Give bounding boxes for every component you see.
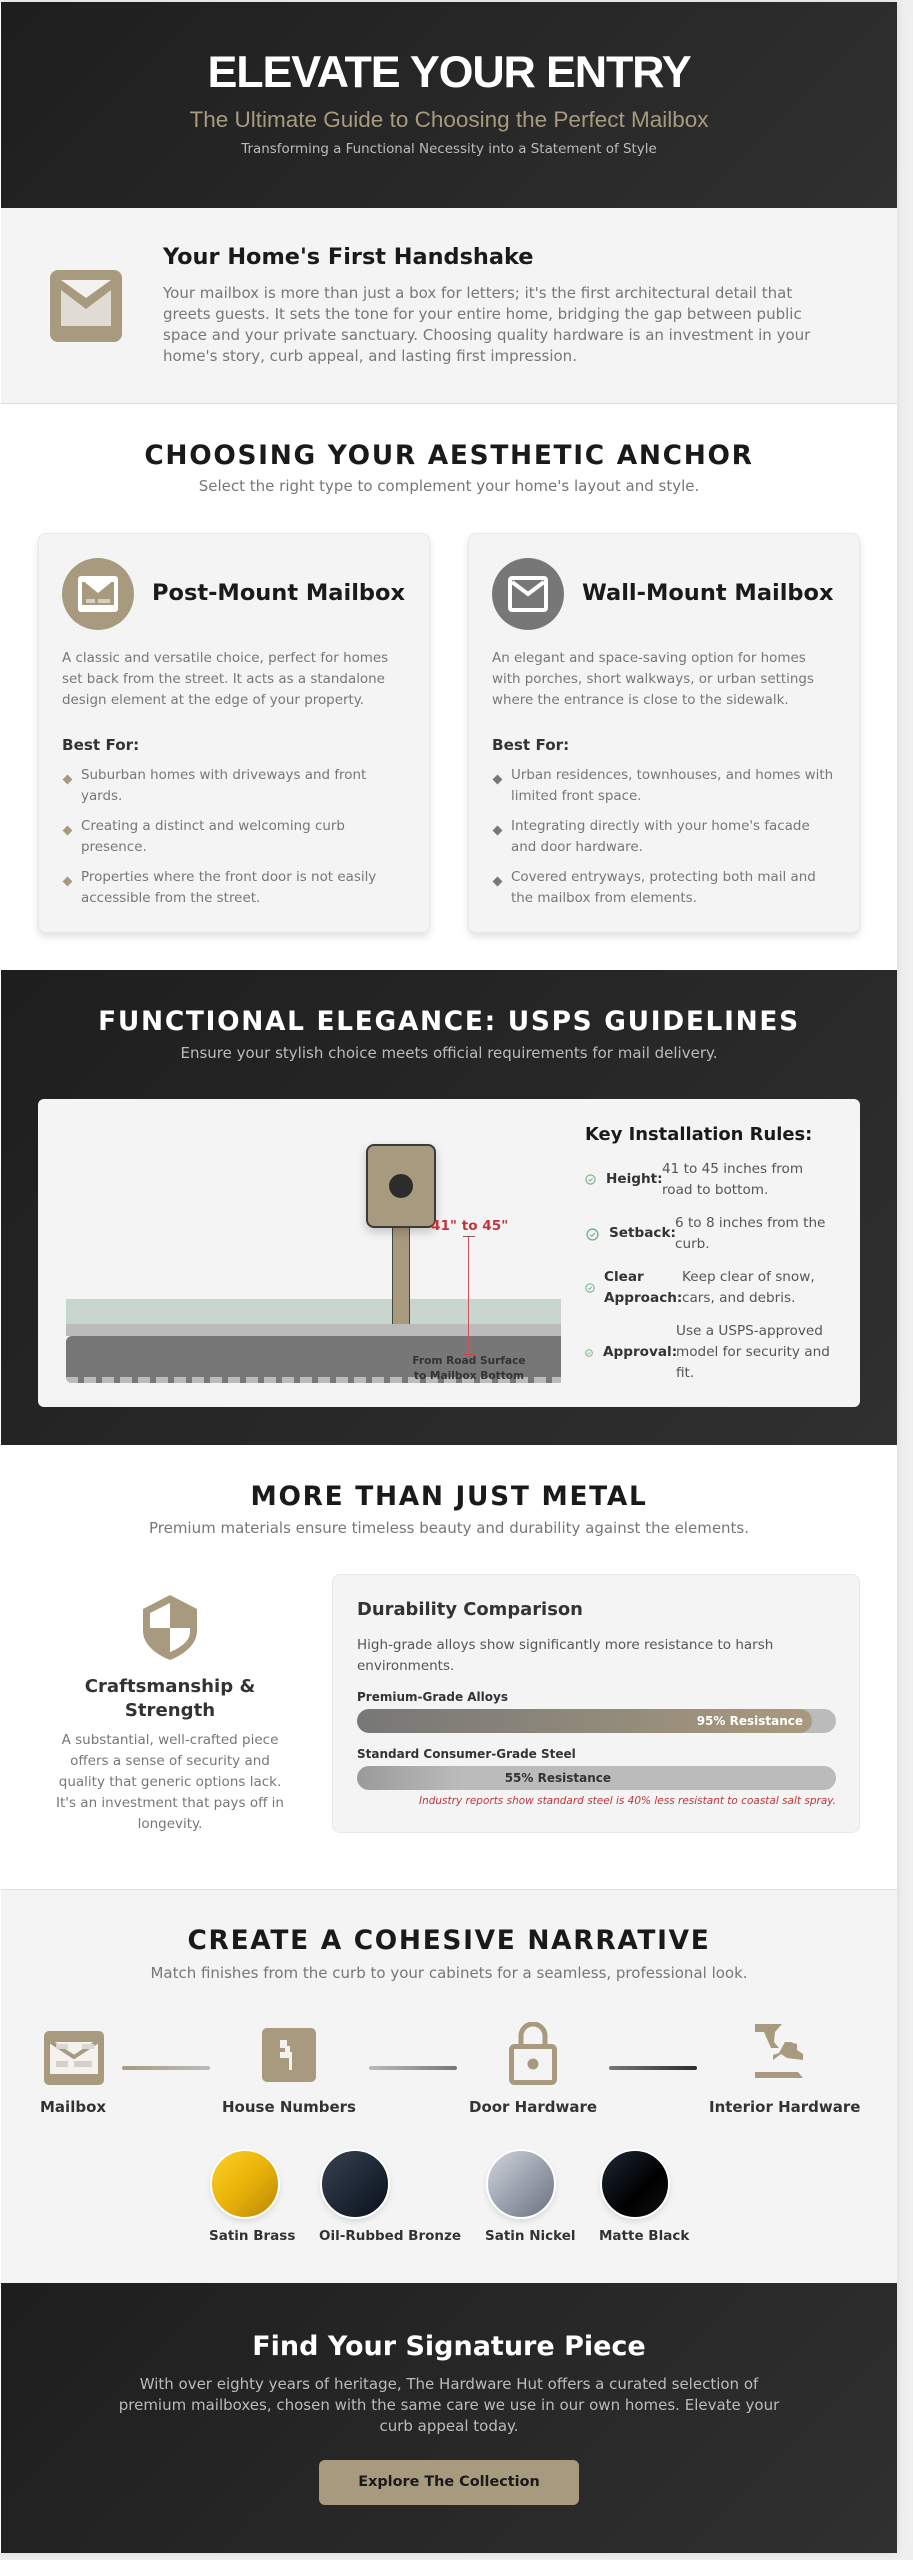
bullet 1: Urban residences, townhouses, and homes with xyxy=(511,768,833,783)
rule: height xyxy=(585,1161,803,1198)
rule: clear approach: Clear xyxy=(604,1269,644,1285)
label: premium: Premium-Grade Alloys xyxy=(357,1690,508,1704)
bullet 3: Covered entryways, protecting both mail and xyxy=(511,870,816,885)
label: door hardware: Door Hardware xyxy=(469,2098,597,2116)
bullet 2 xyxy=(62,819,345,855)
bullet 1: yards. xyxy=(81,789,122,804)
grass band xyxy=(66,1299,561,1324)
measure note: to Mailbox Bottom xyxy=(414,1370,524,1382)
road xyxy=(66,1336,561,1383)
swatch: matte black xyxy=(600,2149,670,2219)
rule: setback: curb. xyxy=(675,1236,710,1252)
swatch: satin nickel xyxy=(486,2149,556,2219)
bullet 2 xyxy=(492,819,810,855)
icon: post-mount mailbox xyxy=(62,558,134,630)
rule: approval: Approval: xyxy=(603,1344,677,1360)
line: door to interior xyxy=(609,2066,697,2070)
section: materials xyxy=(1,1445,897,1889)
rule: setback xyxy=(586,1215,825,1252)
bullet 1 xyxy=(62,768,366,804)
bullet 3: accessible from the street. xyxy=(81,891,260,906)
craftsmanship heading xyxy=(85,1676,255,1721)
card description: set back from the street. It acts as a standalone xyxy=(62,672,385,687)
bullet 2: presence. xyxy=(81,840,147,855)
cta copy: curb appeal today. xyxy=(379,2417,519,2435)
panel: installation xyxy=(38,1099,860,1407)
card: wall-mount xyxy=(468,533,860,933)
icon: shield xyxy=(143,1595,197,1660)
bullet 2: and door hardware. xyxy=(511,840,643,855)
durability description xyxy=(357,1637,773,1674)
craftsmanship heading: Craftsmanship & xyxy=(85,1676,255,1697)
intro copy: home's story, curb appeal, and lasting first impression. xyxy=(163,347,577,365)
industry note: Industry reports show standard steel is 40% less resistant to coastal salt spray. xyxy=(419,1795,836,1807)
intro copy: greets guests. It sets the tone for your entire home, bridging the gap between public xyxy=(163,305,802,323)
card description: A classic and versatile choice, perfect for homes xyxy=(62,651,388,666)
icon: check xyxy=(585,1283,595,1293)
card description: design element at the edge of your property. xyxy=(62,693,364,708)
measure note xyxy=(412,1355,526,1382)
cta copy: premium mailboxes, chosen with the same care we use in our own homes. Elevate your xyxy=(119,2396,779,2414)
subtitle: The Ultimate Guide to Choosing the Perfect Mailbox xyxy=(189,107,708,132)
label: standard: Standard Consumer-Grade Steel xyxy=(357,1747,576,1761)
bar: premium xyxy=(357,1709,836,1733)
line: numbers to door xyxy=(369,2066,457,2070)
section heading: CREATE A COHESIVE NARRATIVE xyxy=(187,1925,710,1956)
rule: approval: fit. xyxy=(676,1365,694,1381)
best for label: Best For: xyxy=(492,736,569,754)
craftsmanship copy: A substantial, well-crafted piece xyxy=(62,1732,278,1748)
icon: house numbers xyxy=(262,2028,316,2082)
panel: durability xyxy=(332,1574,860,1833)
best for list xyxy=(62,768,376,906)
diagram: mailbox height xyxy=(66,1144,561,1383)
heading: Your Home's First Handshake xyxy=(163,244,533,270)
intro copy xyxy=(163,284,810,365)
rule: height: Height: xyxy=(606,1171,663,1187)
section subheading: Ensure your stylish choice meets official requirements for mail delivery. xyxy=(180,1044,718,1062)
durability description: High-grade alloys show significantly more resistance to harsh xyxy=(357,1637,773,1653)
bullet 3: the mailbox from elements. xyxy=(511,891,697,906)
cta copy: With over eighty years of heritage, The Hardware Hut offers a curated selection of xyxy=(140,2375,758,2393)
mailbox xyxy=(366,1144,436,1228)
bar: standard xyxy=(357,1766,836,1790)
cta copy xyxy=(119,2375,780,2435)
rule: approval xyxy=(585,1323,830,1381)
section: cohesive narrative xyxy=(1,1889,897,2283)
section: call to action xyxy=(1,2283,897,2553)
measure note: From Road Surface xyxy=(412,1355,526,1367)
icon: check xyxy=(586,1228,599,1241)
craftsmanship copy: longevity. xyxy=(138,1816,202,1832)
card description: with porches, short walkways, or urban settings xyxy=(492,672,814,687)
bullet 1: Suburban homes with driveways and front xyxy=(81,768,366,783)
icon: mailbox envelope xyxy=(50,270,122,342)
cta button: Explore The Collection xyxy=(358,2474,540,2490)
durability description: environments. xyxy=(357,1658,454,1674)
icon: mailbox xyxy=(44,2031,104,2085)
card: post-mount xyxy=(38,533,430,933)
durability heading: Durability Comparison xyxy=(357,1599,583,1620)
craftsmanship copy: quality that generic options lack. xyxy=(59,1774,281,1790)
card description xyxy=(62,651,388,708)
icon: wall-mount mailbox xyxy=(492,558,564,630)
card description: where the entrance is close to the sidewalk. xyxy=(492,693,789,708)
bullet 2: Integrating directly with your home's facade xyxy=(511,819,810,834)
icon: check xyxy=(585,1349,593,1357)
title: ELEVATE YOUR ENTRY xyxy=(208,47,690,97)
craftsmanship copy: offers a sense of security and xyxy=(70,1753,270,1769)
rules heading: Key Installation Rules: xyxy=(585,1124,812,1145)
best for label: Best For: xyxy=(62,736,139,754)
swatch label: satin brass: Satin Brass xyxy=(209,2228,295,2244)
measure line xyxy=(463,1236,475,1355)
height label: 41" to 45" xyxy=(431,1218,508,1234)
bar: standard: 55% Resistance xyxy=(505,1771,611,1785)
intro panel xyxy=(1,208,897,404)
section subheading: Premium materials ensure timeless beauty and durability against the elements. xyxy=(149,1519,749,1537)
section: aesthetic anchor xyxy=(1,404,897,970)
cta button xyxy=(319,2460,579,2505)
rule: setback: 6 to 8 inches from the xyxy=(675,1215,825,1231)
swatch label: satin nickel: Satin Nickel xyxy=(485,2228,576,2244)
section subheading: Match finishes from the curb to your cabinets for a seamless, professional look. xyxy=(150,1964,748,1982)
rule: setback: Setback: xyxy=(609,1225,676,1241)
swatch label: matte black: Matte Black xyxy=(599,2228,689,2244)
craftsmanship copy: It's an investment that pays off in xyxy=(56,1795,284,1811)
card title: Post-Mount Mailbox xyxy=(152,580,405,606)
bullet 3 xyxy=(492,870,816,906)
cta heading: Find Your Signature Piece xyxy=(252,2331,646,2362)
bullet 1 xyxy=(492,768,833,804)
card title: Wall-Mount Mailbox xyxy=(582,580,834,606)
label: interior hardware: Interior Hardware xyxy=(709,2098,860,2116)
icon: door lock xyxy=(509,2022,557,2085)
swatch label: oil-rubbed bronze: Oil-Rubbed Bronze xyxy=(319,2228,461,2244)
intro copy: space and your private sanctuary. Choosing quality hardware is an investment in your xyxy=(163,326,810,344)
label: mailbox: Mailbox xyxy=(40,2098,106,2116)
line: mailbox to numbers xyxy=(122,2066,210,2070)
bullet 2: Creating a distinct and welcoming curb xyxy=(81,819,345,834)
rule: approval: model for security and xyxy=(676,1344,830,1360)
header banner xyxy=(1,2,897,208)
rule: clear approach: Approach: xyxy=(604,1290,682,1306)
bullet 1: limited front space. xyxy=(511,789,642,804)
craftsmanship heading: Strength xyxy=(125,1700,215,1721)
card description xyxy=(492,651,814,708)
card description: An elegant and space-saving option for homes xyxy=(492,651,806,666)
best for list xyxy=(492,768,833,906)
section heading: MORE THAN JUST METAL xyxy=(251,1481,647,1512)
bullet 3 xyxy=(62,870,376,906)
tagline: Transforming a Functional Necessity into a Statement of Style xyxy=(241,142,657,157)
craftsmanship copy xyxy=(56,1732,284,1832)
rule: clear approach: Keep clear of snow, xyxy=(682,1269,815,1285)
rule: clear approach xyxy=(585,1269,815,1306)
icon: interior hardware xyxy=(755,2024,803,2078)
intro copy: Your mailbox is more than just a box for letters; it's the first architectural detail that xyxy=(163,284,792,302)
swatch: satin brass xyxy=(210,2149,280,2219)
section heading: FUNCTIONAL ELEGANCE: USPS GUIDELINES xyxy=(98,1006,800,1037)
swatch: oil-rubbed bronze xyxy=(320,2149,390,2219)
label: house numbers: House Numbers xyxy=(222,2098,356,2116)
icon: check xyxy=(585,1174,596,1185)
bullet 3: Properties where the front door is not easily xyxy=(81,870,376,885)
section subheading: Select the right type to complement your home's layout and style. xyxy=(199,477,699,495)
rule: clear approach: cars, and debris. xyxy=(682,1290,795,1306)
section heading: CHOOSING YOUR AESTHETIC ANCHOR xyxy=(144,440,754,471)
post xyxy=(392,1227,410,1324)
section: USPS guidelines xyxy=(1,970,897,1445)
rule: height: 41 to 45 inches from xyxy=(662,1161,803,1177)
rule: approval: Use a USPS-approved xyxy=(676,1323,823,1339)
rule: height: road to bottom. xyxy=(662,1182,768,1198)
curb band xyxy=(66,1324,561,1336)
bar: premium: 95% Resistance xyxy=(697,1714,803,1728)
